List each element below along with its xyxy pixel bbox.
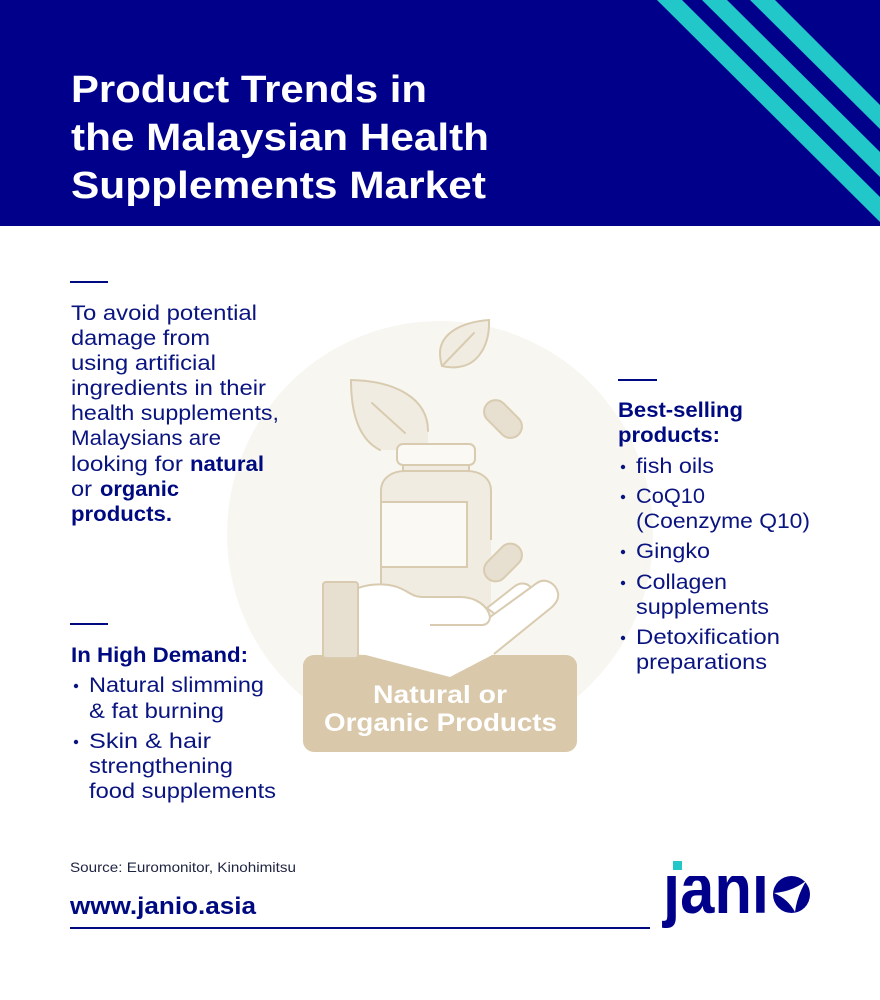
in high demand list: & fat burning bbox=[89, 700, 224, 723]
website link: www.janio.asia bbox=[69, 893, 257, 920]
in high demand list: food supplements bbox=[89, 780, 276, 803]
best-selling products list: Collagen bbox=[636, 571, 727, 594]
background circle bbox=[227, 321, 653, 747]
intro text block: organic bbox=[100, 478, 179, 501]
footer rule bbox=[70, 927, 650, 929]
best-selling products list: products: bbox=[618, 424, 720, 447]
best-selling products list: (Coenzyme Q10) bbox=[636, 510, 810, 533]
label box: Natural or Organic Products bbox=[303, 655, 577, 752]
intro text block: ingredients in their bbox=[71, 377, 266, 400]
best-selling products list: CoQ10 bbox=[636, 485, 705, 508]
intro text block: or bbox=[71, 478, 92, 501]
header banner bbox=[0, 0, 880, 226]
best-selling products list: Detoxification bbox=[636, 626, 780, 649]
in high demand list: In High Demand: bbox=[71, 644, 248, 667]
in high demand list bbox=[70, 623, 276, 803]
intro text block: damage from bbox=[71, 327, 210, 350]
intro text block: looking for bbox=[71, 453, 183, 476]
logo: janio bbox=[660, 835, 810, 929]
icon: open hand bbox=[323, 581, 558, 677]
icon: large leaf bbox=[351, 380, 428, 450]
icon: small leaf bbox=[440, 320, 489, 367]
intro text block: products. bbox=[71, 503, 172, 526]
best-selling products list: preparations bbox=[636, 651, 767, 674]
in high demand list: Skin & hair bbox=[89, 730, 211, 753]
title bbox=[71, 69, 489, 207]
intro text block: To avoid potential bbox=[71, 302, 257, 325]
best-selling products list: supplements bbox=[636, 596, 769, 619]
intro text block: Malaysians are bbox=[71, 427, 221, 450]
logo: janio: jani bbox=[661, 850, 769, 929]
intro text block bbox=[70, 281, 279, 526]
title: Supplements Market bbox=[71, 165, 486, 207]
title: the Malaysian Health bbox=[71, 117, 489, 159]
icon: upper pill bbox=[479, 395, 527, 443]
in high demand list: Natural slimming bbox=[89, 674, 264, 697]
intro text block: health supplements, bbox=[71, 402, 279, 425]
label box: Natural or Organic Products: Natural or bbox=[373, 681, 507, 709]
intro text block: using artificial bbox=[71, 352, 216, 375]
best-selling products list: Best-selling bbox=[618, 399, 743, 422]
in high demand list: strengthening bbox=[89, 755, 233, 778]
intro text block: natural bbox=[190, 453, 264, 476]
label box: Natural or Organic Products: Organic Products bbox=[324, 709, 557, 737]
source note: Source: Euromonitor, Kinohimitsu bbox=[70, 859, 296, 875]
icon: lower pill bbox=[479, 539, 527, 586]
best-selling products list bbox=[618, 379, 810, 674]
best-selling products list: fish oils bbox=[636, 455, 714, 478]
best-selling products list: Gingko bbox=[636, 540, 710, 563]
icon: supplement bottle bbox=[381, 444, 491, 610]
title: Product Trends in bbox=[71, 69, 427, 111]
